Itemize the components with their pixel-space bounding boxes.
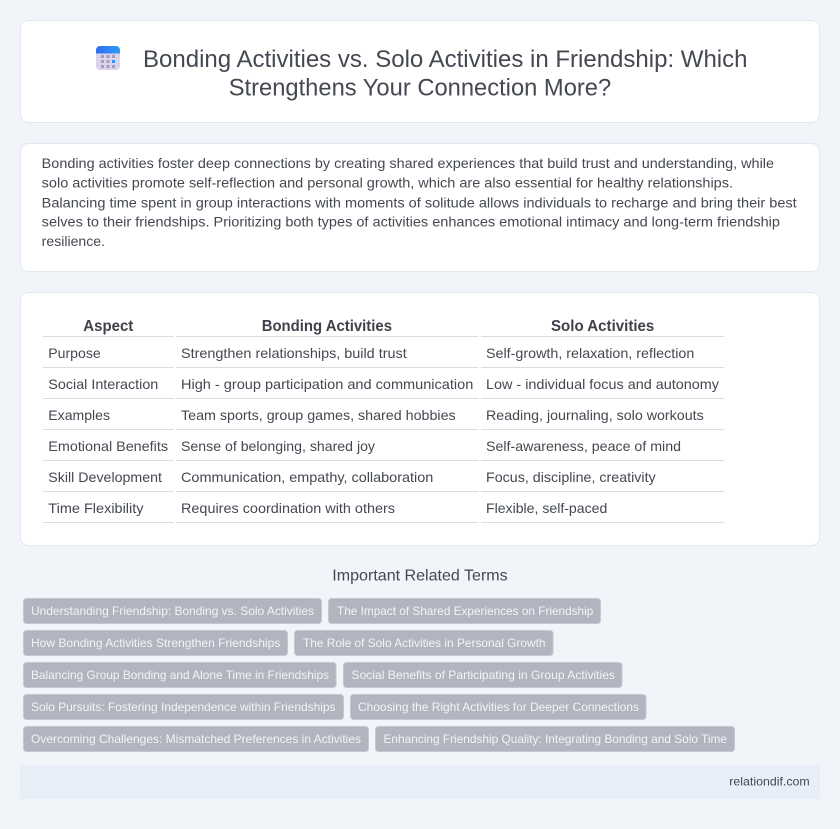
- tag: [24, 726, 368, 752]
- tag: Balancing Group Bonding and Alone Time in Friendships: [31, 668, 329, 682]
- title: Bonding Activities vs. Solo Activities in Friendship: Which: [143, 46, 748, 73]
- table row: time flexibility: Flexible, self-paced: [486, 500, 607, 516]
- table row: emotional benefits: Sense of belonging, shared joy: [181, 438, 375, 454]
- table row: social interaction: Low - individual focus and autonomy: [486, 376, 719, 392]
- text block: introduction paragraph: Bonding activities foster deep connections by creating shared experiences that build trust and understanding, while: [42, 155, 774, 171]
- tag: [294, 630, 553, 656]
- panel: introduction: [20, 144, 820, 272]
- table row: emotional benefits: Self-awareness, peace of mind: [486, 438, 681, 454]
- table header: [43, 318, 724, 337]
- text block: introduction paragraph: resilience.: [42, 233, 105, 249]
- table row: social interaction: [43, 376, 724, 399]
- icon: calendar: [96, 46, 120, 70]
- tag: The Impact of Shared Experiences on Friendship: [337, 604, 594, 618]
- table row: emotional benefits: Emotional Benefits: [48, 438, 168, 454]
- tag: Enhancing Friendship Quality: Integrating Bonding and Solo Time: [384, 732, 727, 746]
- table row: purpose: Self-growth, relaxation, reflection: [486, 345, 694, 361]
- tag: Social Benefits of Participating in Group Activities: [352, 668, 615, 682]
- table row: examples: [43, 407, 724, 430]
- tag: [344, 662, 622, 688]
- tag: [24, 598, 322, 624]
- tag: [350, 694, 646, 720]
- tag: [376, 726, 734, 752]
- table row: purpose: [43, 345, 724, 368]
- table row: time flexibility: Time Flexibility: [48, 500, 143, 516]
- tag: [24, 662, 336, 688]
- footer: [20, 765, 820, 799]
- related terms tags: [24, 598, 734, 752]
- table header: Solo Activities: [551, 318, 654, 335]
- tag: Overcoming Challenges: Mismatched Preferences in Activities: [31, 732, 361, 746]
- footer: relationdif.com: [729, 775, 810, 789]
- table header: Bonding Activities: [262, 318, 392, 335]
- table row: skill development: [43, 469, 724, 492]
- text block: introduction paragraph: Balancing time spent in group interactions with moments of solitude allows individuals to recharge and bring their best: [42, 194, 797, 210]
- table row: examples: Reading, journaling, solo workouts: [486, 407, 704, 423]
- title: Strengthens Your Connection More?: [229, 75, 611, 102]
- table row: purpose: Strengthen relationships, build trust: [181, 345, 407, 361]
- tag: How Bonding Activities Strengthen Friendships: [31, 636, 280, 650]
- table row: purpose: Purpose: [48, 345, 101, 361]
- table row: examples: Examples: [48, 407, 110, 423]
- tag: [328, 598, 600, 624]
- panel: title card: [20, 20, 820, 122]
- table row: social interaction: High - group participation and communication: [181, 376, 473, 392]
- table row: time flexibility: Requires coordination with others: [181, 500, 395, 516]
- table row: examples: Team sports, group games, shared hobbies: [181, 407, 456, 423]
- tag: Solo Pursuits: Fostering Independence within Friendships: [31, 700, 336, 714]
- tag: The Role of Solo Activities in Personal Growth: [303, 636, 546, 650]
- table row: time flexibility: [43, 500, 724, 523]
- text block: introduction paragraph: selves to their friendships. Prioritizing both types of activities enhances emotional intimacy and long-term friendship: [42, 214, 780, 230]
- title: [143, 46, 748, 102]
- table row: skill development: Skill Development: [48, 469, 162, 485]
- table row: skill development: Communication, empathy, collaboration: [181, 469, 433, 485]
- tag: [24, 694, 344, 720]
- tag: Choosing the Right Activities for Deeper Connections: [358, 700, 639, 714]
- text block: introduction paragraph: [42, 155, 797, 249]
- tag: [24, 630, 288, 656]
- text block: introduction paragraph: solo activities promote self-reflection and personal growth, which are also essential for healthy relationships.: [42, 174, 733, 190]
- heading: important related terms: Important Related Terms: [332, 568, 508, 585]
- table row: emotional benefits: [43, 438, 724, 461]
- table header: Aspect: [83, 318, 134, 335]
- tag: Understanding Friendship: Bonding vs. Solo Activities: [31, 604, 314, 618]
- table row: social interaction: Social Interaction: [48, 376, 158, 392]
- table row: skill development: Focus, discipline, creativity: [486, 469, 656, 485]
- panel: comparison table: [20, 292, 820, 546]
